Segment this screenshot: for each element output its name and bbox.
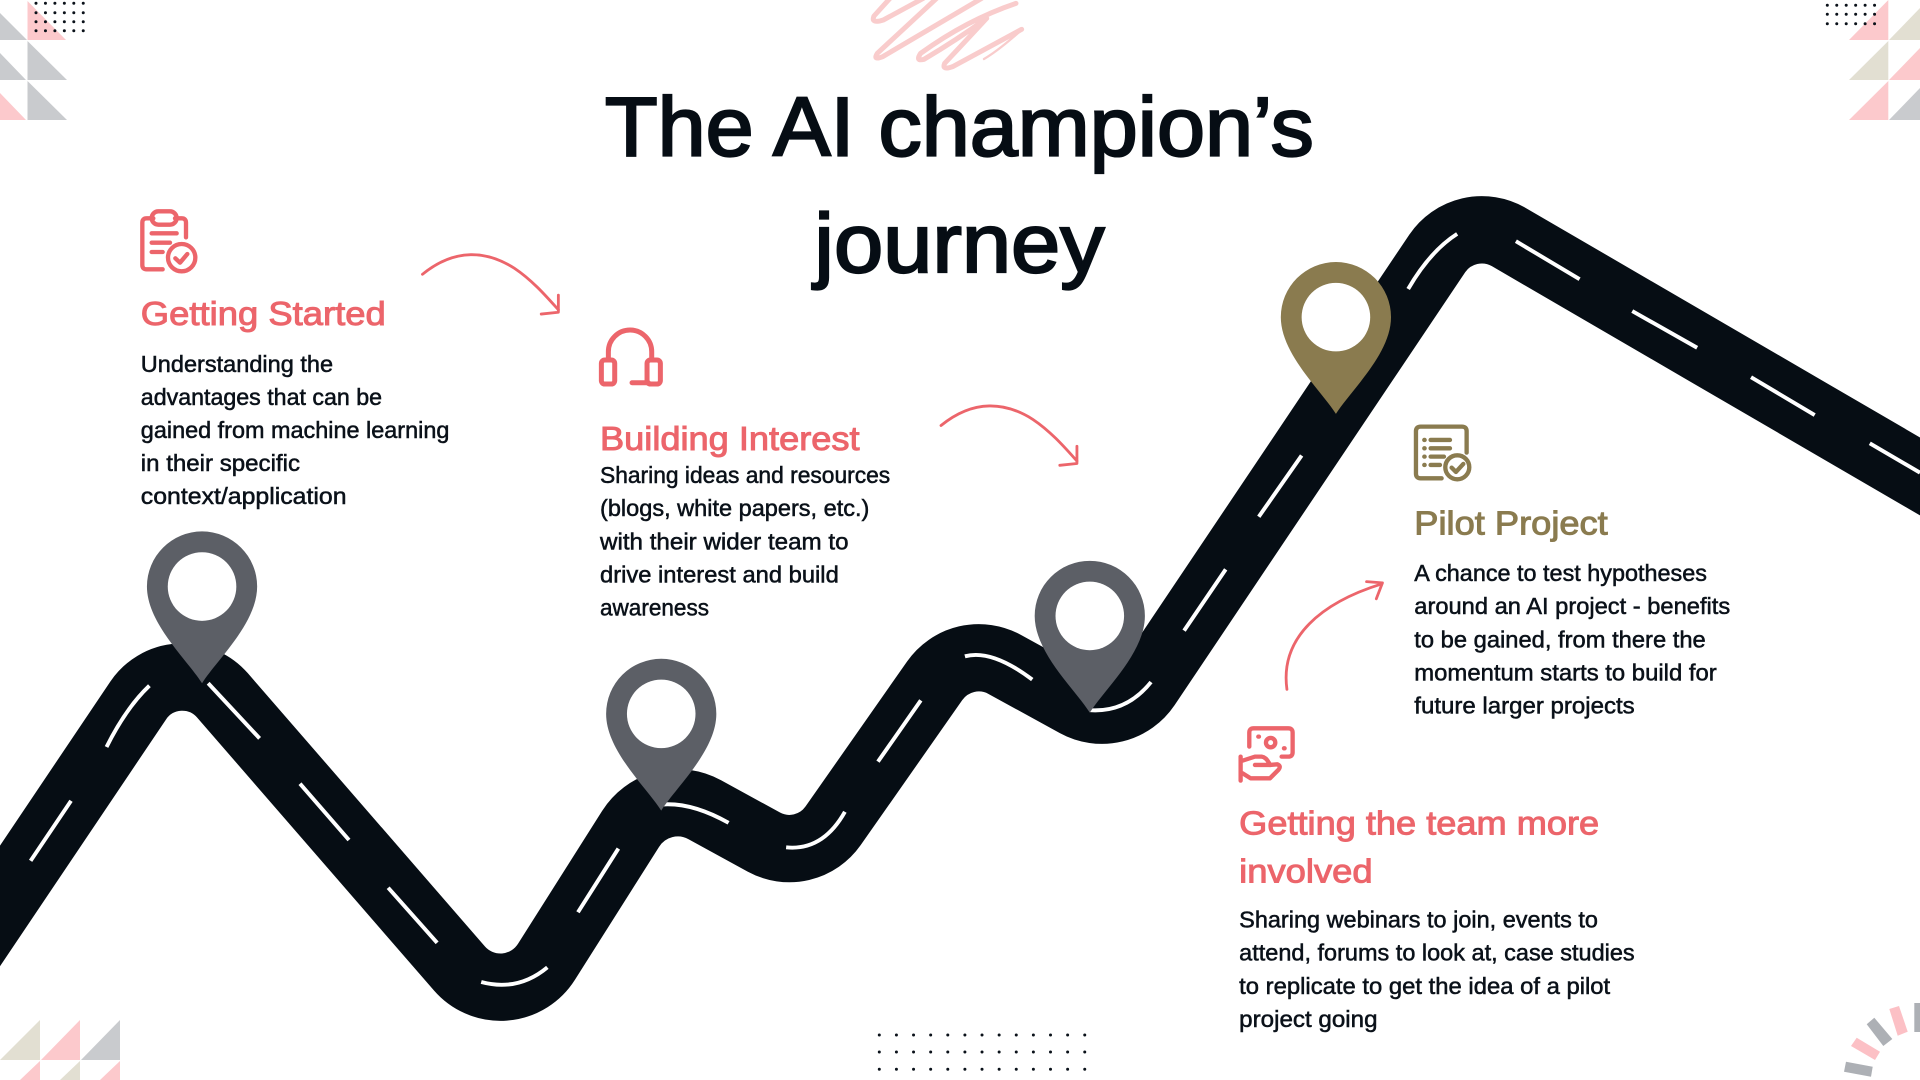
heading: Getting the team more — [1239, 806, 1599, 843]
panel: getting started — [141, 211, 449, 509]
icon: checklist — [1416, 427, 1469, 479]
title: The AI champion’s — [605, 81, 1314, 174]
heading: involved — [1239, 853, 1373, 890]
bottom dots — [879, 1035, 1086, 1069]
panel: building interest — [599, 330, 890, 620]
text block: context/application — [141, 483, 347, 509]
text block: project going — [1239, 1006, 1378, 1032]
icon: hand with banknote — [1241, 728, 1293, 781]
text block — [141, 351, 449, 509]
text block: A chance to test hypotheses — [1414, 560, 1707, 586]
text block: Sharing ideas and resources — [600, 462, 890, 488]
top-right triangles — [1849, 0, 1920, 120]
pin: building interest — [606, 659, 716, 811]
heading: Getting Started — [141, 296, 386, 333]
top-left dots — [36, 3, 84, 31]
bottom-left triangles — [0, 1020, 120, 1080]
text block: drive interest and build — [600, 561, 839, 587]
text block — [1414, 560, 1730, 718]
text block: Understanding the — [141, 351, 333, 377]
panel: pilot project — [1414, 427, 1730, 718]
pin: pilot project — [1281, 262, 1391, 414]
text block: future larger projects — [1414, 692, 1635, 718]
heading: Building Interest — [600, 421, 860, 458]
arrow: getting started to building interest — [422, 255, 558, 314]
panel: getting the team more involved — [1239, 728, 1635, 1032]
text block: attend, forums to look at, case studies — [1239, 940, 1635, 966]
top-left triangles — [0, 1, 67, 120]
arrow: team to pilot project — [1286, 582, 1382, 689]
text block: momentum starts to build for — [1414, 659, 1717, 685]
text block — [1239, 907, 1635, 1032]
icon: headphones — [601, 330, 660, 384]
heading — [1239, 806, 1599, 890]
title — [605, 81, 1314, 290]
top-right dots — [1827, 5, 1876, 24]
text block: awareness — [600, 594, 709, 620]
icon: clipboard check — [142, 211, 195, 271]
text block: advantages that can be — [141, 384, 382, 410]
pin: getting team involved — [1035, 561, 1145, 713]
top scribble — [873, 0, 1022, 68]
road centre dashes — [31, 234, 1920, 985]
heading: Pilot Project — [1414, 506, 1608, 543]
text block: to replicate to get the idea of a pilot — [1239, 973, 1611, 999]
text block — [599, 462, 890, 620]
text block: Sharing webinars to join, events to — [1239, 907, 1598, 933]
text block: in their specific — [141, 450, 300, 476]
text block: (blogs, white papers, etc.) — [600, 495, 869, 521]
title: journey — [811, 197, 1105, 290]
text block: around an AI project - benefits — [1414, 593, 1730, 619]
road — [0, 230, 1920, 987]
bottom-right radial bars — [1844, 1003, 1920, 1077]
text block: with their wider team to — [599, 528, 849, 554]
text block: to be gained, from there the — [1414, 626, 1706, 652]
arrow: building interest to team — [941, 406, 1077, 465]
text block: gained from machine learning — [141, 417, 449, 443]
pin: getting started — [147, 531, 257, 683]
